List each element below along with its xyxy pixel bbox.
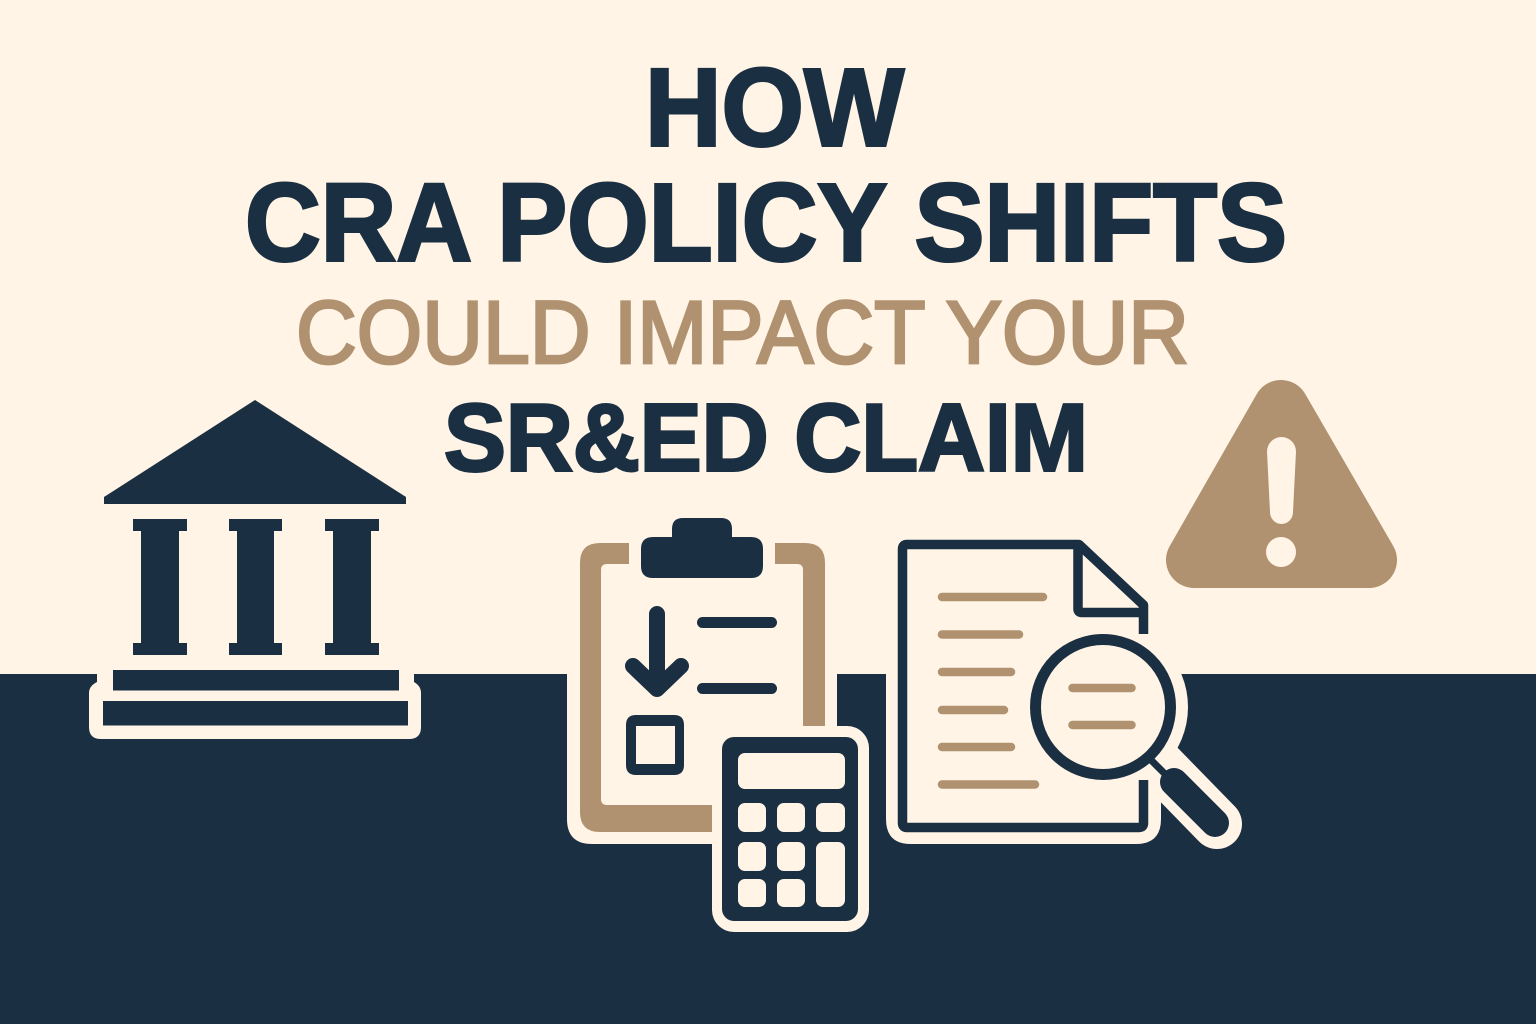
calculator body bbox=[722, 737, 858, 921]
clipboard halo bbox=[567, 674, 837, 844]
exclamation dot bbox=[1266, 537, 1296, 567]
document halo bbox=[886, 674, 1161, 844]
list line 2 bbox=[702, 683, 772, 694]
magnifier lens bbox=[1036, 640, 1170, 774]
clipboard clip bbox=[641, 518, 763, 578]
document fold bbox=[1078, 545, 1143, 612]
title line: HOW: HOW bbox=[645, 46, 904, 170]
clipboard board bbox=[580, 543, 825, 832]
calculator halo bbox=[712, 726, 869, 932]
lens text lines bbox=[1072, 688, 1132, 725]
triangle bbox=[1194, 408, 1369, 560]
icon: clipboard bbox=[567, 518, 837, 844]
icon: document with magnifying glass bbox=[886, 544, 1217, 844]
roof bbox=[104, 400, 406, 504]
lens halo bbox=[1018, 622, 1188, 792]
icon: warning triangle bbox=[1194, 408, 1369, 567]
lower step bbox=[103, 701, 408, 726]
exclamation bar bbox=[1267, 437, 1296, 524]
base halo bbox=[89, 674, 421, 739]
calculator screen bbox=[738, 753, 845, 789]
title bbox=[245, 46, 1287, 492]
calculator keys bbox=[738, 803, 845, 907]
upper step bbox=[113, 670, 399, 690]
list line 1 bbox=[702, 617, 772, 628]
icon: government building bbox=[89, 400, 421, 739]
title line: COULD IMPACT YOUR: COULD IMPACT YOUR bbox=[296, 282, 1189, 382]
column right bbox=[325, 519, 379, 655]
document outline bbox=[902, 544, 1144, 828]
checkbox bbox=[626, 715, 684, 775]
magnifier handle bbox=[1174, 782, 1215, 823]
document text lines bbox=[942, 597, 1043, 784]
icon: calculator bbox=[712, 726, 869, 932]
column left bbox=[133, 519, 187, 655]
title line: SR&ED CLAIM: SR&ED CLAIM bbox=[444, 384, 1088, 492]
title line: CRA POLICY SHIFTS: CRA POLICY SHIFTS bbox=[245, 162, 1287, 284]
navy lower band bbox=[0, 674, 1536, 1024]
magnifier neck bbox=[1151, 760, 1168, 777]
column middle bbox=[229, 519, 282, 655]
magnifier handle halo bbox=[1140, 745, 1217, 824]
arrow down bbox=[633, 614, 681, 689]
